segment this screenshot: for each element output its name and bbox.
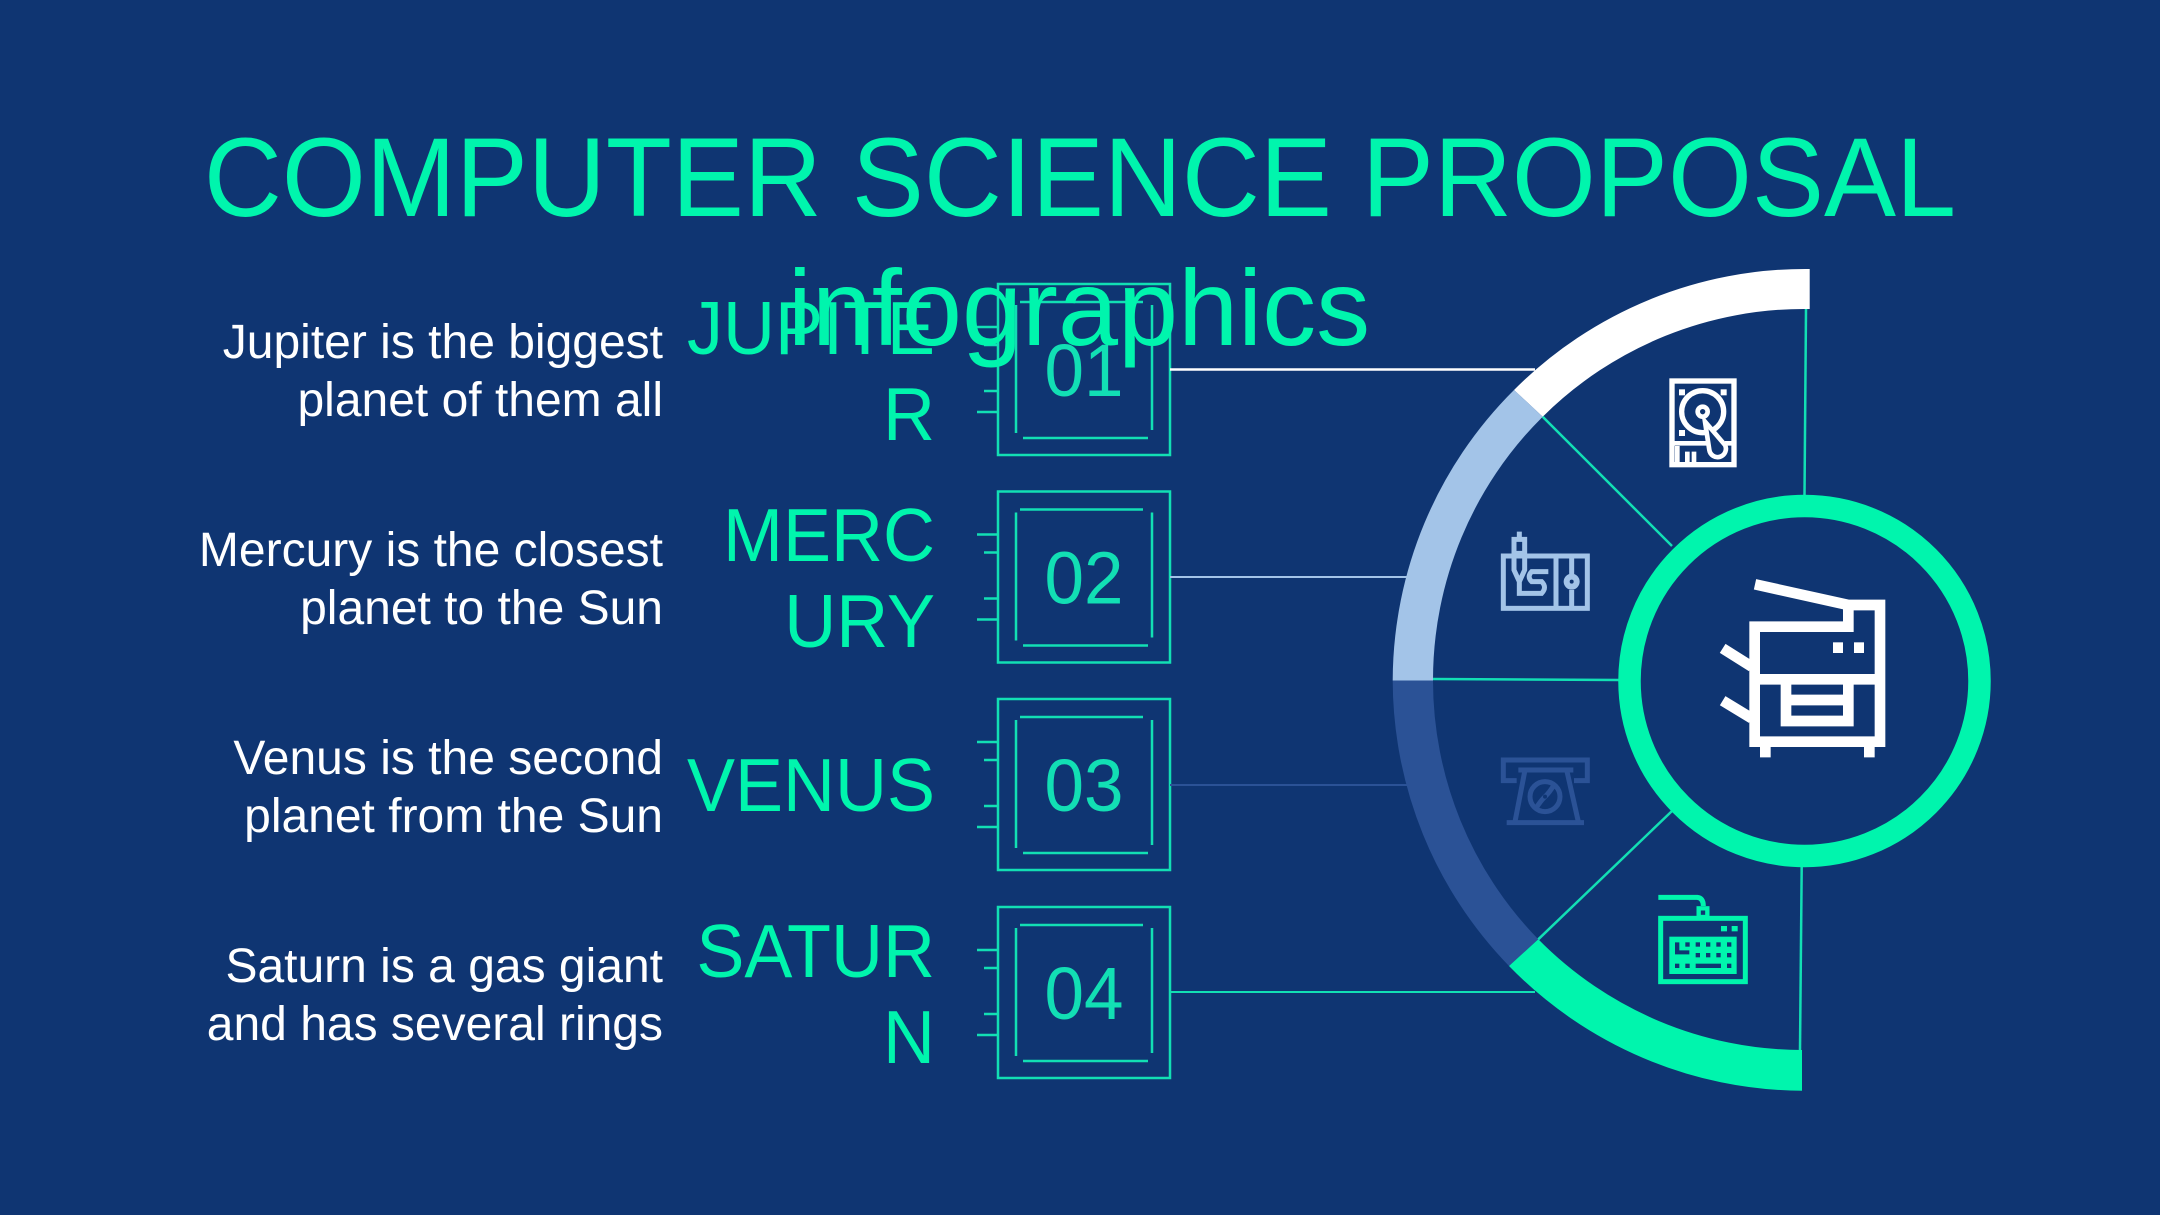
arc segment: white (1514, 269, 1810, 417)
label: Mercury: URY (784, 580, 935, 663)
label: Jupiter (687, 287, 935, 456)
number box 04: 04 (1045, 953, 1123, 1035)
spokes (1433, 309, 1806, 1050)
label: Jupiter: R (883, 373, 935, 456)
description: Mercury: Mercury is the closest (199, 523, 664, 577)
label: Saturn: N (883, 996, 935, 1079)
number box 04 (977, 907, 1170, 1078)
label: Jupiter: JUPITE (687, 287, 935, 370)
description: Venus: Venus is the second (233, 731, 663, 785)
label: Saturn (696, 910, 935, 1079)
description: Saturn: Saturn is a gas giant (225, 939, 664, 993)
description: Mercury: planet to the Sun (300, 581, 663, 635)
title: infographics (788, 247, 1370, 368)
segmented arc (1393, 269, 1810, 1091)
label: Saturn: SATUR (696, 910, 935, 993)
title: COMPUTER SCIENCE PROPOSAL (204, 115, 1956, 240)
icon: soldering station (1503, 532, 1587, 608)
connector 03 (1170, 784, 1407, 786)
connector 02 (1170, 576, 1408, 578)
connector 01 (1170, 368, 1535, 371)
row 2: Mercury (199, 492, 1408, 663)
description: Jupiter (223, 315, 664, 427)
number box 03: 03 (1045, 745, 1123, 827)
arc segment: mid blue (1393, 680, 1538, 966)
number box 03 (977, 699, 1170, 870)
number box 01: 01 (1045, 330, 1123, 412)
number box 02 (977, 492, 1170, 662)
icon: photocopier (1723, 584, 1880, 757)
description: Saturn: and has several rings (207, 997, 663, 1051)
icon: hard drive (1672, 381, 1734, 465)
icon: disc device (1503, 760, 1587, 823)
label: Venus: VENUS (687, 744, 935, 827)
icon: keyboard (1658, 897, 1745, 982)
row 3: Venus (233, 699, 1407, 870)
row 1: Jupiter (223, 284, 1535, 456)
number box 01 (977, 284, 1170, 455)
connector 04 (1170, 991, 1535, 993)
description: Mercury (199, 523, 664, 635)
label: Mercury: MERC (723, 494, 935, 577)
description: Venus (233, 731, 663, 843)
label: Mercury (723, 494, 935, 663)
number box 02: 02 (1045, 537, 1123, 620)
description: Saturn (207, 939, 664, 1051)
description: Jupiter: planet of them all (297, 373, 663, 427)
description: Venus: planet from the Sun (244, 789, 663, 843)
title (204, 115, 1956, 368)
arc segment: light blue (1393, 390, 1543, 680)
description: Jupiter: Jupiter is the biggest (223, 315, 664, 369)
row 4: Saturn (207, 907, 1535, 1079)
central ring (1630, 506, 1980, 856)
arc segment: green (1509, 939, 1802, 1091)
